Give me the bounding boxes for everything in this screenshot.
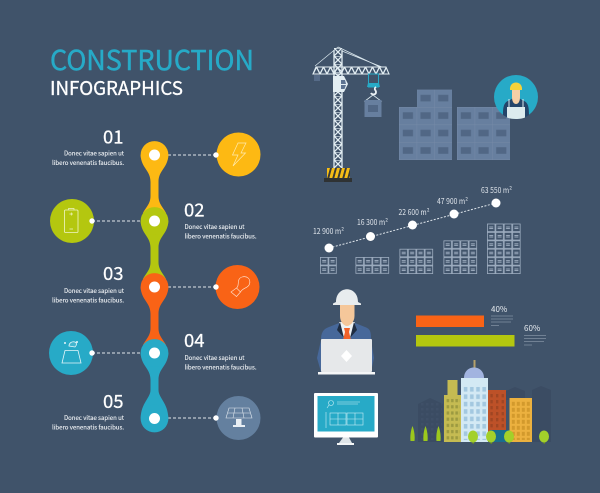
step 01 text: libero venenatis faucibus. [52, 158, 124, 167]
monitor with blueprint [314, 393, 378, 445]
percentage bars [416, 304, 546, 346]
crane counterweight [314, 75, 320, 81]
value labels: 12 900 m² [313, 226, 344, 237]
step 03 text: Donec vitae sapien ut [64, 286, 125, 295]
buildings [399, 90, 510, 160]
step 04 text: libero venenatis faucibus. [184, 362, 257, 372]
value labels: 16 300 m² [357, 217, 388, 228]
bar: 60% [416, 335, 514, 346]
step 03 text: 03 [103, 260, 124, 286]
node 04 [141, 339, 168, 367]
value labels: 63 550 m² [481, 185, 512, 196]
timeline spine [141, 155, 168, 418]
step 02 text: Donec vitae sapien ut [184, 222, 245, 231]
heading: construction: CONSTRUCTION [50, 38, 254, 78]
crane jib [313, 67, 389, 74]
connector lines [92, 155, 217, 418]
shirt and tie [339, 322, 355, 340]
red tower [488, 390, 506, 432]
title [50, 38, 254, 101]
yellow tower [510, 398, 532, 442]
laptop [318, 339, 375, 374]
worker face [512, 88, 520, 104]
face [340, 303, 354, 326]
teal podium [490, 430, 516, 442]
helmet [333, 289, 361, 305]
bar: 40% [416, 316, 484, 327]
building: right block [457, 107, 510, 160]
step 01 text: Donec vitae sapien ut [64, 148, 125, 158]
area growth chart [313, 185, 521, 274]
step 03 text [52, 260, 125, 304]
blueprint detail [326, 400, 363, 428]
step 05 text: 05 [103, 388, 124, 414]
icon: worker avatar [494, 75, 538, 119]
worker helmet [510, 82, 522, 90]
bar buildings [320, 224, 521, 274]
icon: battery [50, 199, 95, 243]
worker apron [507, 107, 525, 119]
timeline [92, 141, 217, 432]
engineer with laptop [317, 289, 375, 374]
crane cables [315, 47, 382, 67]
icon: solar panel [213, 396, 260, 440]
icon: plant pot [49, 331, 95, 375]
value labels: 47 900 m² [437, 196, 468, 207]
label: 60%: 60% [524, 323, 541, 334]
worker shoulders [503, 98, 529, 118]
node 02 [141, 207, 168, 235]
background buildings [418, 386, 551, 442]
step 04 text [184, 327, 257, 372]
step 05 text: libero venenatis faucibus. [52, 422, 124, 432]
step 03 text: libero venenatis faucibus. [52, 296, 124, 304]
crane load block [364, 100, 382, 117]
node 03 [141, 273, 168, 301]
step 05 text: Donec vitae sapien ut [64, 413, 125, 422]
step 05 text [52, 388, 125, 432]
label: 40%: 40% [491, 304, 508, 315]
olive tower [444, 380, 461, 442]
step 04 text: Donec vitae sapien ut [184, 353, 245, 362]
crane [313, 47, 389, 182]
value labels: 22 600 m² [398, 207, 430, 218]
node 01 [141, 141, 168, 169]
data points [324, 198, 500, 252]
building: left block [399, 90, 452, 160]
value labels [313, 185, 512, 237]
trend line [329, 203, 496, 248]
crane hook [365, 74, 381, 101]
step 02 text: libero venenatis faucibus. [184, 232, 257, 240]
step 02 text: 02 [184, 196, 205, 222]
suit [317, 323, 374, 372]
city skyline [410, 360, 551, 444]
heading: infographics: INFOGRAPHICS [50, 74, 183, 101]
crane base [324, 168, 352, 182]
cone trees [410, 426, 441, 441]
step 02 text [184, 196, 257, 240]
crane cab [333, 76, 348, 92]
step 01 text [52, 124, 125, 167]
node 05 [141, 405, 168, 432]
round trees [468, 430, 549, 444]
icon: light bulb [213, 265, 260, 309]
step 01 text: 01 [103, 124, 124, 150]
crane mast [334, 48, 342, 168]
icon: lightning [213, 132, 260, 176]
main tower [461, 360, 488, 442]
step 04 text: 04 [184, 327, 205, 353]
